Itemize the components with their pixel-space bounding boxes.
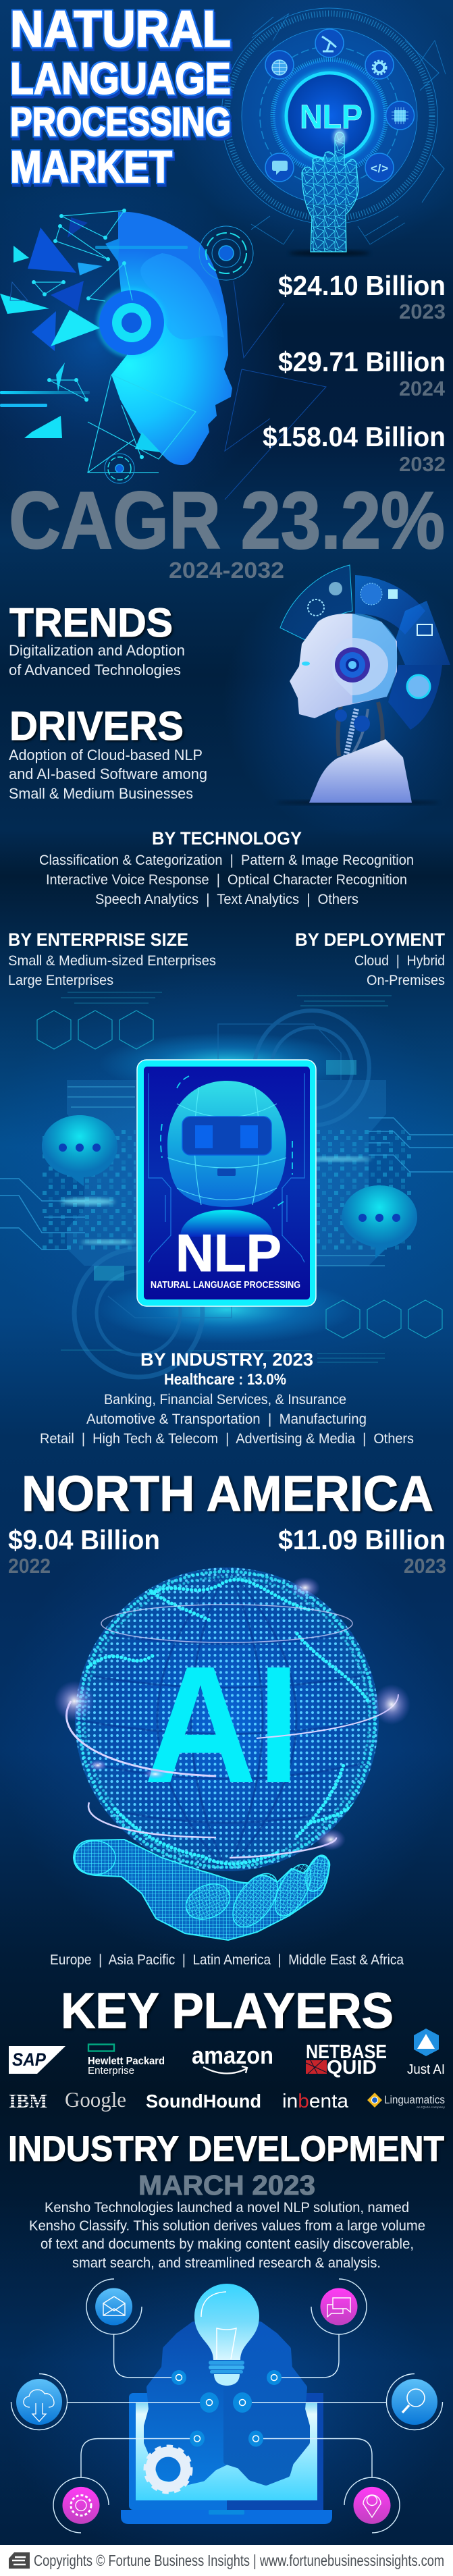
icon: chat (265, 153, 294, 182)
shoulders (309, 739, 412, 803)
logo: NetBase Quid (306, 2041, 387, 2078)
drivers: DRIVERS (9, 703, 184, 749)
icon: cloud download (11, 2373, 68, 2430)
by technology: Classification & Categorization | Pattern & Image Recognition (39, 853, 414, 868)
logo: IBM: IBM (9, 2091, 47, 2112)
by industry: Banking, Financial Services, & Insurance (104, 1392, 346, 1407)
robot eye (302, 647, 370, 682)
value 2022: 2022 (8, 1554, 51, 1578)
value 2023: $11.09 Billion (278, 1524, 446, 1555)
illustration: robot with holographic fan (277, 565, 450, 805)
by industry: Retail | High Tech & Telecom | Advertising & Media | Others (40, 1431, 414, 1447)
icon: pink chat (311, 2279, 367, 2334)
title: PROCESSING (10, 100, 231, 144)
by industry: Healthcare : 13.0% (164, 1370, 286, 1388)
icon: envelope (86, 2279, 142, 2334)
holographic fan (280, 565, 450, 730)
illustration: NLP robot scene (0, 992, 453, 1377)
title: MARKET (10, 142, 172, 192)
logo: inbenta: inbenta (282, 2091, 349, 2112)
north america: NORTH AMERICA (22, 1466, 433, 1522)
logo: Linguamatics (367, 2093, 446, 2109)
logo: Google: Google (65, 2087, 126, 2112)
by enterprise size: BY ENTERPRISE SIZE (8, 930, 188, 950)
trends: Digitalization and Adoption (9, 642, 185, 659)
illustration: AI head (0, 209, 326, 500)
value 2023: 2023 (404, 1554, 446, 1578)
icon: Fortune Business Insights logo (9, 2552, 30, 2569)
NLP central disc (282, 69, 377, 163)
target circle bottom (105, 454, 134, 483)
icon: chip (386, 101, 415, 130)
chat bubble left (42, 1115, 117, 1186)
logo: SAP: SAP (12, 2049, 47, 2070)
title (10, 1, 231, 192)
neck cables (335, 702, 383, 757)
NLP central disc: NLP (300, 98, 363, 136)
drivers: and AI-based Software among (9, 766, 207, 782)
logo: Linguamatics: Linguamatics (384, 2093, 445, 2106)
logo: Linguamatics: an IQVIA company (417, 2105, 446, 2109)
north america (8, 1466, 446, 1578)
by enterprise size: Small & Medium-sized Enterprises (8, 953, 216, 969)
light bulb (194, 2284, 259, 2386)
triangle shards (0, 217, 161, 452)
illustration: AI globe on hand (54, 1567, 410, 1940)
other regions: Europe | Asia Pacific | Latin America | Middle East & Africa (50, 1952, 404, 1968)
connector lines (68, 2334, 387, 2477)
AI letters: AI (144, 1632, 300, 1818)
by technology: BY TECHNOLOGY (152, 828, 302, 849)
laptop (121, 2393, 332, 2524)
icon: globe (265, 51, 294, 79)
logo: Just AI: Just AI (407, 2062, 445, 2077)
icon: code: </> (371, 162, 388, 175)
wireframe hand (74, 1840, 334, 1940)
logo: NetBase Quid: QUID (327, 2057, 377, 2078)
head (290, 614, 397, 718)
chat bubble right (342, 1185, 417, 1258)
logo: amazon: amazon (192, 2041, 273, 2069)
by enterprise size (8, 930, 216, 988)
target circle top (199, 226, 253, 280)
orbit rings (54, 1577, 410, 1858)
wireframe hand (289, 129, 370, 256)
industry development (8, 2129, 444, 2271)
logo: Hewlett Packard Enterprise: Hewlett Packard (88, 2056, 165, 2067)
title: NATURAL (10, 1, 231, 58)
icon: pink map pin (344, 2477, 400, 2533)
logo: Just AI (407, 2029, 445, 2077)
key players heading: KEY PLAYERS (61, 1983, 394, 2039)
ear rings (97, 288, 167, 358)
trends: TRENDS (9, 600, 173, 645)
by deployment: Cloud | Hybrid (354, 953, 445, 969)
2023 value (278, 270, 446, 323)
description: Kensho Classify. This solution derives values from a large volume (29, 2218, 425, 2234)
illustration: laptop, brain and bulb (11, 2279, 443, 2533)
drivers: Small & Medium Businesses (9, 785, 193, 802)
2024 value: $29.71 Billion (278, 346, 446, 377)
by deployment (295, 930, 445, 988)
brain (147, 2325, 307, 2482)
market size figures (263, 270, 446, 476)
trends (9, 600, 185, 678)
robot shoulders (180, 1210, 273, 1237)
by industry: BY INDUSTRY, 2023 (140, 1349, 313, 1370)
description (29, 2200, 425, 2271)
device card (137, 1060, 316, 1306)
hexagons bottom right (326, 1300, 442, 1338)
description: smart search, and streamlined research & analysis. (72, 2255, 381, 2271)
drivers: Adoption of Cloud-based NLP (9, 747, 203, 763)
date: MARCH 2023 (138, 2170, 315, 2201)
value 2022: $9.04 Billion (8, 1524, 160, 1555)
robot head (161, 1075, 292, 1208)
2023 value: $24.10 Billion (278, 270, 446, 301)
2032 value (263, 421, 446, 476)
logo: SAP (9, 2046, 65, 2074)
by deployment: BY DEPLOYMENT (295, 930, 445, 950)
NLP big label: NLP (176, 1223, 282, 1283)
icon: gear (365, 51, 394, 79)
horizontal streaks (0, 246, 188, 407)
head silhouette (111, 212, 232, 465)
logo: SoundHound: SoundHound (146, 2091, 261, 2112)
logo: Hewlett Packard Enterprise (88, 2044, 165, 2076)
by industry: Automotive & Transportation | Manufacturing (86, 1412, 367, 1427)
icon: code (365, 153, 394, 182)
title: LANGUAGE (10, 53, 231, 103)
value 2022 (8, 1524, 160, 1578)
description: of text and documents by making content easily discoverable, (41, 2236, 414, 2252)
icon: robot arm (315, 29, 344, 57)
icon: search (386, 2373, 443, 2430)
logo: NetBase Quid: NETBASE (306, 2041, 387, 2063)
network lines (32, 209, 196, 473)
2024 value (278, 346, 446, 400)
by enterprise size: Large Enterprises (8, 973, 113, 988)
2024 value: 2024 (399, 377, 446, 400)
logo: Hewlett Packard Enterprise: Enterprise (88, 2065, 134, 2076)
icon: pink gear (53, 2477, 109, 2533)
drivers (9, 703, 207, 802)
key players logos (8, 2029, 446, 2112)
dotted globe (75, 1567, 379, 1871)
by technology: Interactive Voice Response | Optical Character Recognition (46, 872, 407, 888)
thin outline lines (225, 281, 326, 500)
footer bar (0, 2545, 453, 2576)
scene backdrop (0, 992, 453, 1377)
NLP full name: NATURAL LANGUAGE PROCESSING (151, 1280, 300, 1291)
2032 value: 2032 (399, 452, 446, 476)
2032 value: $158.04 Billion (263, 421, 446, 452)
description: Kensho Technologies launched a novel NLP solution, named (45, 2200, 409, 2216)
CAGR: 2024-2032 (169, 558, 284, 583)
2023 value: 2023 (399, 300, 446, 323)
by technology: Speech Analytics | Text Analytics | Others (95, 892, 358, 907)
connector nodes (171, 2370, 282, 2446)
trends: of Advanced Technologies (9, 662, 181, 678)
by technology (39, 828, 414, 907)
by industry (40, 1349, 414, 1447)
gear on screen (146, 2447, 190, 2492)
value 2023 (278, 1524, 446, 1578)
by deployment: On-Premises (367, 973, 445, 988)
illustration: NLP touch dial with hand (221, 8, 446, 256)
hexagons top left (37, 1011, 153, 1049)
